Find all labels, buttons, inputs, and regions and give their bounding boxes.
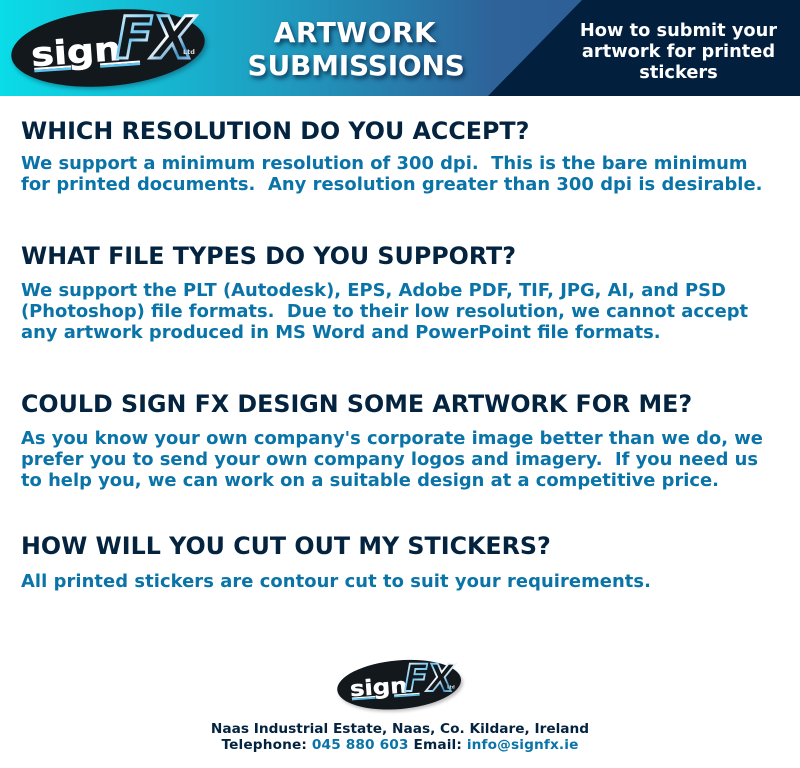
logo: header: [8, 2, 210, 96]
header subtitle: How to submit your artwork for printed stickers: [580, 20, 777, 83]
heading: design: COULD SIGN FX DESIGN SOME ARTWORK FOR ME?: [21, 390, 692, 418]
logo: footer: Ltd: [447, 685, 455, 690]
footer address: Naas Industrial Estate, Naas, Co. Kildare, Ireland Telephone: 045 880 603 Email: info@signfx.ie: [211, 720, 589, 753]
logo: header: Ltd: [183, 48, 195, 56]
text: cutting: All printed stickers are contour cut to suit your requirements.: [21, 571, 651, 592]
logo: footer: [337, 657, 464, 714]
text: resolution: We support a minimum resolution of 300 dpi. This is the bare minimum for printed documents. Any resolution greater than 300 dpi is desirable.: [21, 153, 763, 195]
logo: footer: sign: [349, 672, 408, 701]
header title: ARTWORK SUBMISSIONS: [248, 16, 465, 82]
heading: resolution: WHICH RESOLUTION DO YOU ACCEPT?: [21, 117, 529, 145]
text: file types: We support the PLT (Autodesk), EPS, Adobe PDF, TIF, JPG, AI, and PSD (Photoshop) file formats. Due to their low resolution, we cannot accept any artwork produced in MS Word and PowerPoint file formats.: [21, 280, 748, 343]
logo: header: FX: [116, 4, 197, 72]
logo: header: sign: [30, 29, 122, 74]
logo: footer: FX: [404, 657, 456, 700]
header banner: [0, 0, 800, 96]
heading: cutting: HOW WILL YOU CUT OUT MY STICKERS?: [21, 532, 551, 560]
text: design: As you know your own company's corporate image better than we do, we prefer you to send your own company logos and imagery. If you need us to help you, we can work on a suitable design at a competitive price.: [21, 428, 763, 491]
heading: file types: WHAT FILE TYPES DO YOU SUPPORT?: [21, 242, 516, 270]
